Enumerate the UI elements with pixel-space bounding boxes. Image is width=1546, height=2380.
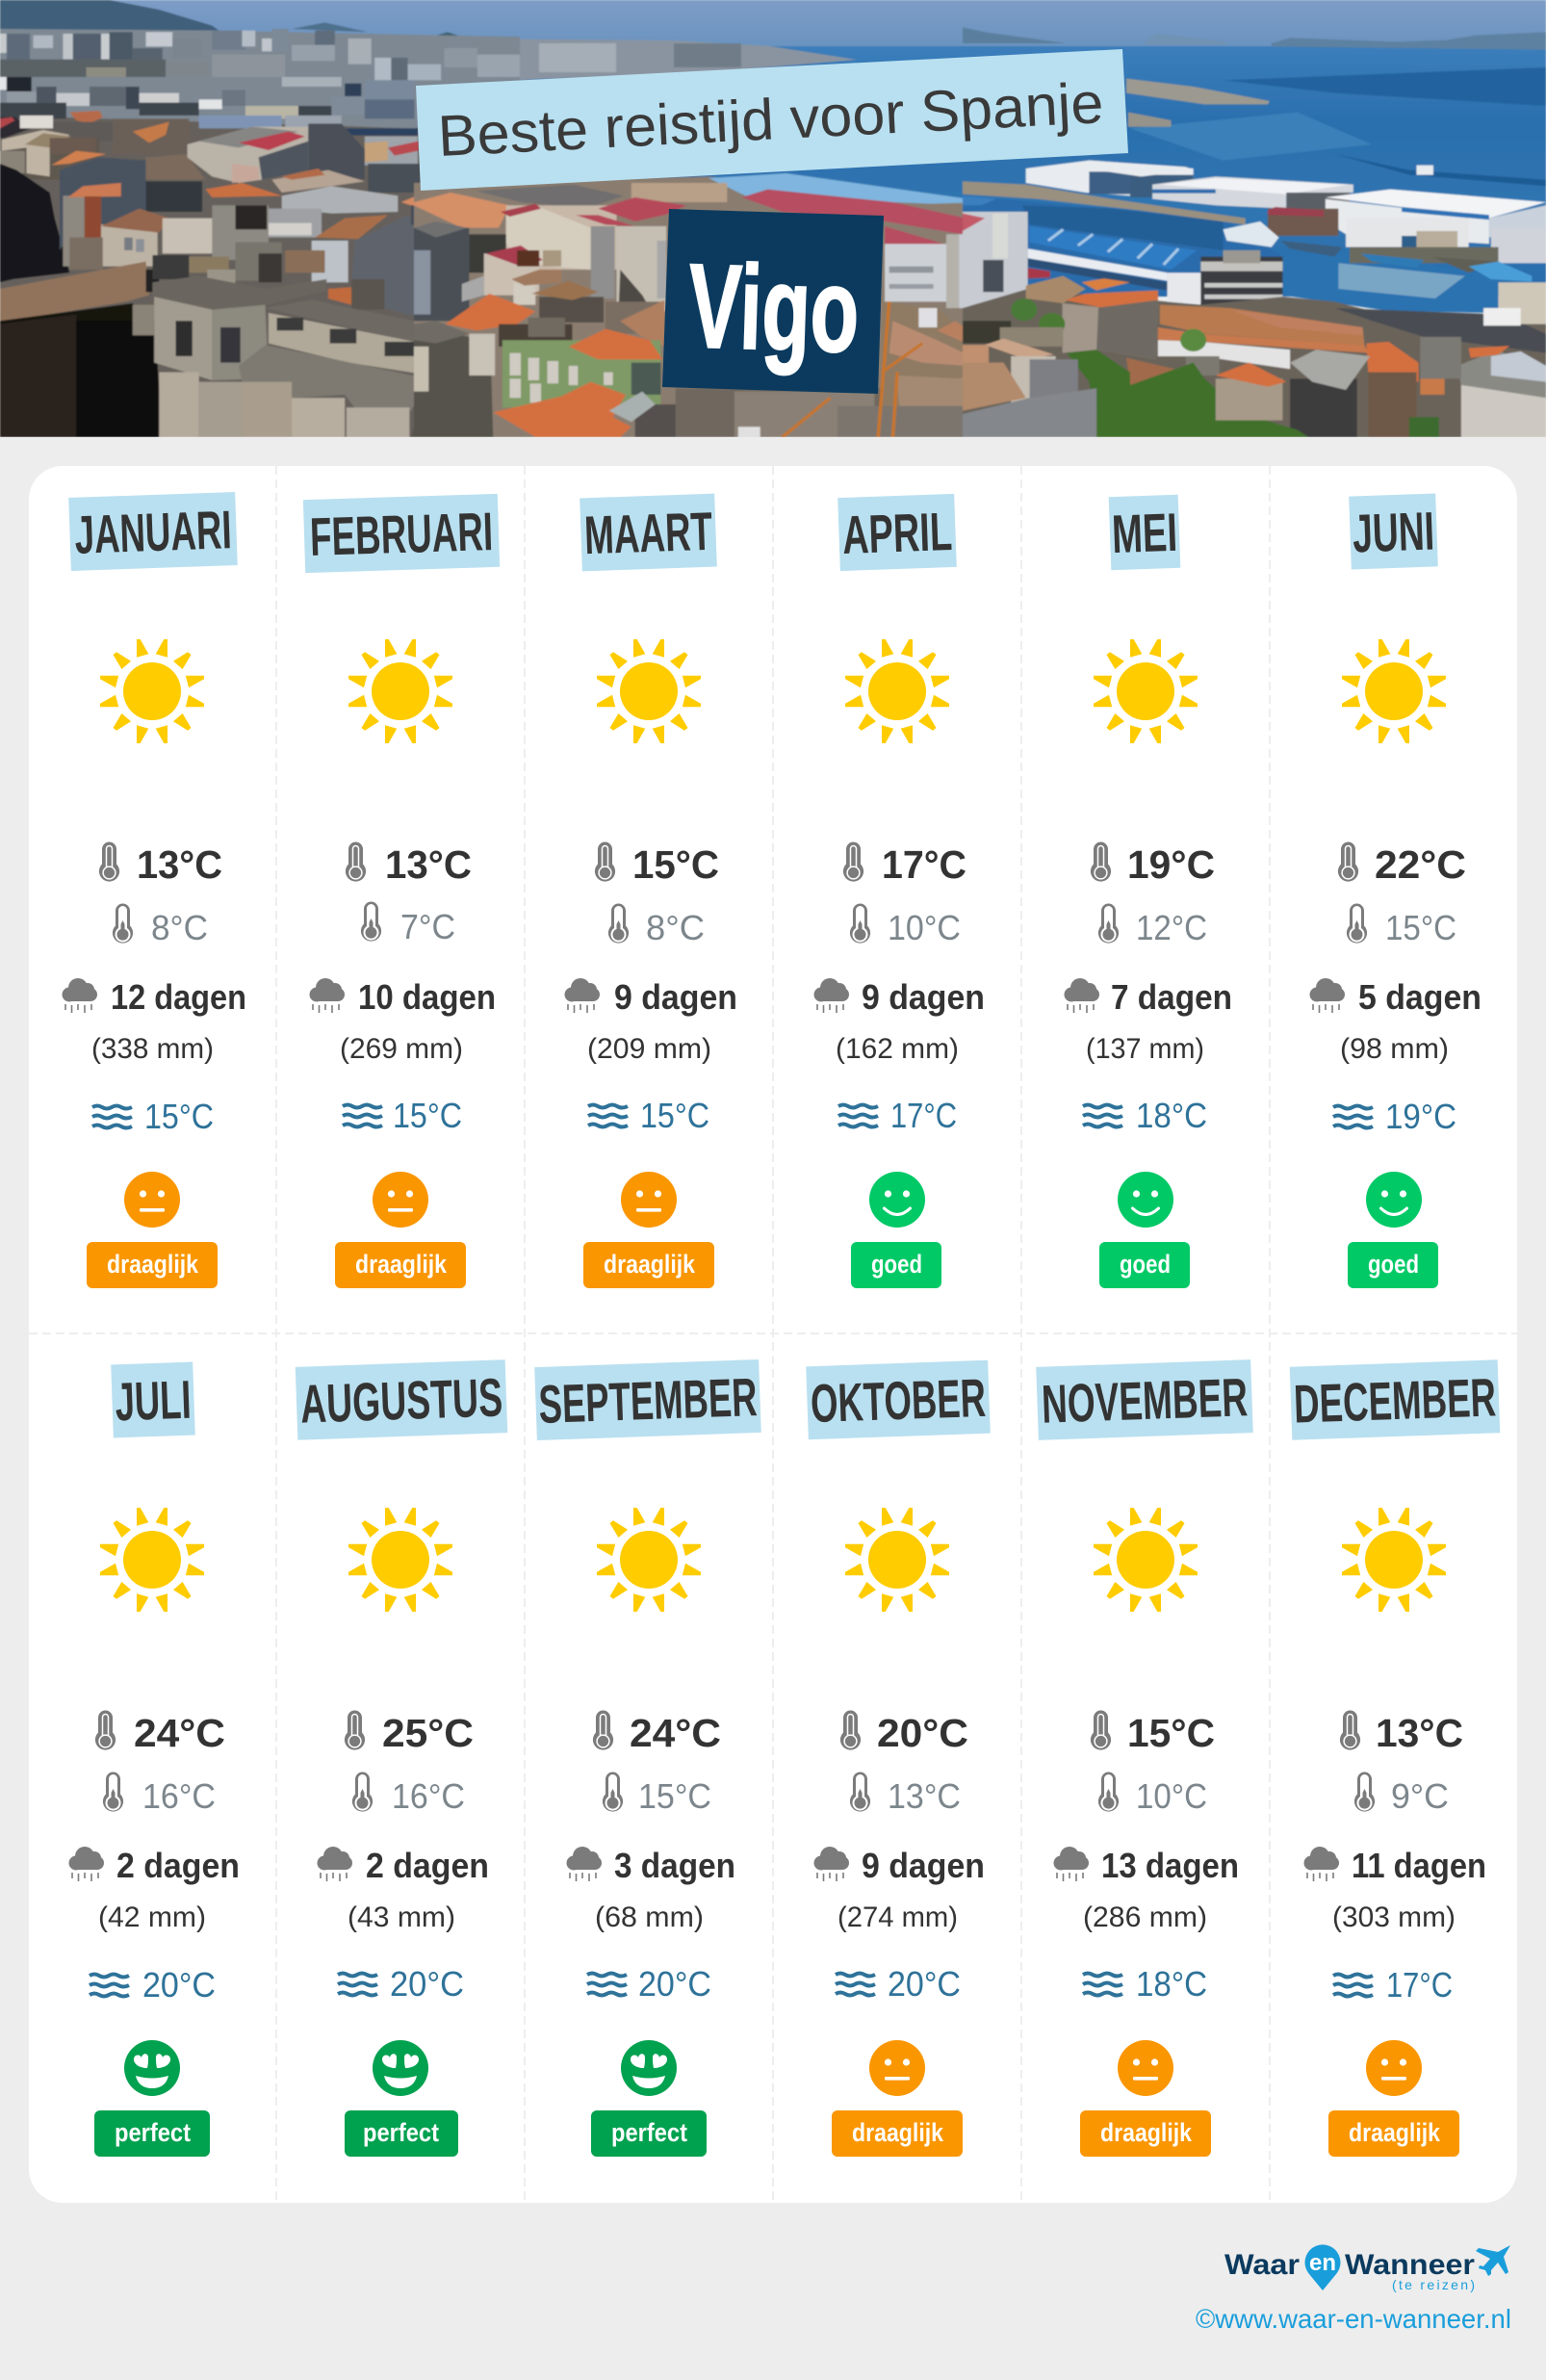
min temperature — [361, 901, 455, 946]
rain days — [69, 1846, 240, 1885]
icon: sun — [597, 1508, 701, 1612]
rainfall: (42 mm) — [98, 1901, 206, 1933]
rainfall: (162 mm) — [836, 1033, 959, 1065]
icon: sun — [348, 639, 452, 743]
min temperature — [1098, 903, 1207, 947]
min temperature: 10°C — [1136, 1776, 1207, 1816]
panel: april — [814, 494, 985, 1288]
rainfall: (286 mm) — [1083, 1901, 1207, 1933]
rain days: 12 dagen — [111, 977, 246, 1017]
rainfall: (68 mm) — [595, 1901, 704, 1933]
footer logo: (te reizen) — [1392, 2277, 1475, 2292]
rain days: 7 dagen — [1111, 977, 1232, 1017]
city name box: Vigo — [686, 240, 861, 378]
footer logo: Waar — [1224, 2249, 1300, 2281]
panel: maart — [564, 494, 737, 1288]
rainfall: (209 mm) — [587, 1033, 711, 1065]
max temperature — [1338, 841, 1466, 887]
min temperature — [1098, 1772, 1207, 1816]
month heading — [111, 1362, 195, 1437]
rain days — [62, 977, 246, 1017]
rating: goed — [871, 1250, 922, 1279]
month heading: JULI — [114, 1369, 193, 1432]
rating — [583, 1172, 714, 1288]
sea temperature: 17°C — [1386, 1965, 1453, 2005]
sea temperature — [836, 1964, 961, 2004]
max temperature: 20°C — [877, 1711, 968, 1755]
min temperature: 8°C — [151, 908, 208, 947]
rating — [851, 1172, 941, 1288]
rain days — [1053, 1846, 1239, 1885]
rain days — [1065, 977, 1232, 1017]
rating: perfect — [115, 2118, 191, 2147]
rating — [345, 2040, 458, 2157]
rain days: 10 dagen — [358, 977, 496, 1017]
month heading — [837, 494, 957, 571]
rating — [94, 2040, 210, 2157]
rating — [1080, 2040, 1211, 2157]
rain days: 9 dagen — [862, 977, 985, 1017]
sea temperature — [587, 1964, 711, 2004]
min temperature — [352, 1772, 465, 1816]
rating — [832, 2040, 963, 2157]
rating — [591, 2040, 707, 2157]
rain days — [1303, 1846, 1486, 1885]
max temperature: 22°C — [1375, 842, 1466, 887]
min temperature: 15°C — [1385, 908, 1456, 947]
sea temperature — [1083, 1096, 1207, 1135]
footer copyright url: ©www.waar-en-wanneer.nl — [1196, 2304, 1511, 2334]
min temperature — [1354, 1772, 1449, 1816]
min temperature: 16°C — [142, 1776, 216, 1816]
panel: januari — [62, 492, 246, 1288]
min temperature: 13°C — [888, 1776, 961, 1816]
icon: sun — [1094, 639, 1198, 743]
city name box — [662, 209, 884, 394]
rating — [1099, 1172, 1190, 1288]
footer logo — [1224, 2244, 1510, 2292]
month heading — [534, 1359, 761, 1440]
month heading — [1036, 1359, 1253, 1440]
icon: sun — [348, 1508, 452, 1612]
title banner — [416, 49, 1128, 191]
max temperature: 24°C — [134, 1711, 225, 1755]
month heading: FEBRUARI — [309, 501, 494, 567]
rainfall: (338 mm) — [91, 1033, 214, 1065]
max temperature — [595, 841, 719, 887]
min temperature: 9°C — [1391, 1776, 1449, 1816]
rating: perfect — [363, 2118, 439, 2147]
max temperature: 17°C — [882, 842, 966, 887]
rain days — [814, 1846, 985, 1885]
sea temperature — [838, 1096, 957, 1135]
month heading — [296, 1359, 507, 1440]
min temperature — [1347, 903, 1456, 947]
month heading: AUGUSTUS — [299, 1366, 503, 1435]
max temperature: 24°C — [630, 1711, 721, 1755]
icon: sun — [845, 1508, 949, 1612]
rating: draaglijk — [1100, 2118, 1193, 2147]
min temperature — [113, 903, 208, 947]
panel: oktober — [806, 1360, 991, 2157]
max temperature — [99, 841, 222, 887]
sea temperature — [1333, 1965, 1453, 2005]
max temperature: 13°C — [385, 842, 472, 887]
month heading — [1349, 493, 1438, 570]
month heading: MAART — [583, 501, 713, 565]
rating — [87, 1172, 218, 1288]
footer logo: Wanneer — [1345, 2249, 1475, 2281]
sea temperature — [1083, 1964, 1207, 2004]
sea temperature: 20°C — [638, 1964, 711, 2004]
month heading: MEI — [1111, 502, 1178, 564]
panel: november — [1036, 1359, 1253, 2157]
min temperature: 16°C — [392, 1776, 465, 1816]
icon: sun — [1094, 1508, 1198, 1612]
min temperature — [103, 1772, 216, 1816]
max temperature: 15°C — [1127, 1711, 1215, 1755]
rain days: 11 dagen — [1352, 1846, 1486, 1885]
max temperature — [346, 841, 472, 887]
icon: sun — [845, 639, 949, 743]
panel: september — [534, 1359, 761, 2157]
sea temperature: 20°C — [888, 1964, 961, 2004]
rating: draaglijk — [1349, 2118, 1441, 2147]
sea temperature: 15°C — [393, 1096, 462, 1135]
panel: calendar card — [29, 466, 1517, 2203]
rating — [335, 1172, 466, 1288]
max temperature: 19°C — [1127, 842, 1215, 887]
panel: augustus — [296, 1359, 507, 2157]
rating: goed — [1120, 1250, 1171, 1279]
month heading: JANUARI — [73, 499, 233, 565]
panel: mei — [1065, 495, 1232, 1288]
rain days: 9 dagen — [614, 977, 737, 1017]
max temperature: 13°C — [137, 842, 222, 887]
sea temperature: 20°C — [390, 1964, 464, 2004]
sea temperature: 18°C — [1136, 1964, 1207, 2004]
max temperature — [95, 1710, 225, 1755]
icon: sun — [1342, 1508, 1446, 1612]
min temperature: 8°C — [646, 908, 705, 947]
rating: draaglijk — [355, 1250, 448, 1279]
min temperature: 15°C — [638, 1776, 711, 1816]
sea temperature — [343, 1096, 462, 1135]
max temperature — [1091, 1710, 1215, 1755]
max temperature — [1340, 1710, 1463, 1755]
month heading — [806, 1360, 991, 1439]
month heading: NOVEMBER — [1041, 1366, 1249, 1435]
rain days: 3 dagen — [614, 1846, 735, 1885]
panel: juni — [1309, 493, 1482, 1288]
max temperature — [593, 1710, 721, 1755]
rainfall: (98 mm) — [1340, 1033, 1449, 1065]
min temperature: 10°C — [888, 908, 961, 947]
max temperature: 15°C — [632, 842, 719, 887]
month heading — [68, 492, 238, 571]
min temperature — [850, 903, 961, 947]
rating: draaglijk — [852, 2118, 944, 2147]
sea temperature — [338, 1964, 464, 2004]
icon: map pin: en — [1309, 2250, 1336, 2276]
rain days: 2 dagen — [116, 1846, 240, 1885]
sea temperature — [588, 1096, 709, 1135]
rainfall: (137 mm) — [1086, 1033, 1204, 1065]
min temperature: 12°C — [1136, 908, 1207, 947]
max temperature — [840, 1710, 968, 1755]
sea temperature: 19°C — [1385, 1097, 1456, 1136]
rating: goed — [1368, 1250, 1419, 1279]
sea temperature: 17°C — [890, 1096, 957, 1135]
rain days — [318, 1846, 489, 1885]
icon: sun — [1342, 639, 1446, 743]
rain days — [1309, 977, 1482, 1017]
month heading: OKTOBER — [810, 1367, 987, 1434]
max temperature: 25°C — [382, 1711, 474, 1755]
rain days — [814, 977, 985, 1017]
month heading — [303, 494, 500, 573]
rating — [1348, 1172, 1438, 1288]
max temperature: 13°C — [1376, 1711, 1463, 1755]
month heading: JUNI — [1352, 501, 1435, 563]
icon: sun — [100, 639, 204, 743]
icon: sun — [100, 1508, 204, 1612]
sea temperature — [1333, 1097, 1456, 1136]
rating: draaglijk — [107, 1250, 199, 1279]
sea temperature — [90, 1965, 216, 2005]
rain days — [564, 977, 737, 1017]
rain days — [310, 977, 496, 1017]
rainfall: (274 mm) — [837, 1901, 958, 1933]
icon: map pin — [1305, 2244, 1340, 2290]
min temperature: 7°C — [400, 907, 455, 946]
rating — [1328, 2040, 1459, 2157]
max temperature — [1091, 841, 1215, 887]
month heading: SEPTEMBER — [537, 1366, 759, 1435]
rain days — [566, 1846, 735, 1885]
sea temperature: 18°C — [1136, 1096, 1207, 1135]
panel: juli — [69, 1362, 240, 2157]
icon: plane — [1476, 2245, 1510, 2276]
sea temperature: 20°C — [142, 1965, 216, 2005]
photo: aerial view of Vigo harbour — [0, 0, 1546, 437]
panel: februari — [303, 494, 500, 1288]
rating: draaglijk — [604, 1250, 696, 1279]
panel: december — [1290, 1359, 1500, 2157]
min temperature — [850, 1772, 961, 1816]
icon: sun — [597, 639, 701, 743]
sea temperature: 15°C — [144, 1097, 214, 1136]
month heading — [1109, 495, 1180, 570]
rain days: 9 dagen — [862, 1846, 985, 1885]
min temperature — [608, 903, 705, 947]
rain days: 13 dagen — [1101, 1846, 1239, 1885]
max temperature — [345, 1710, 474, 1755]
rating: perfect — [611, 2118, 687, 2147]
rain days: 5 dagen — [1358, 977, 1482, 1017]
max temperature — [843, 841, 966, 887]
rainfall: (303 mm) — [1332, 1901, 1456, 1933]
rain days: 2 dagen — [366, 1846, 489, 1885]
sea temperature — [92, 1097, 214, 1136]
month heading: APRIL — [841, 501, 953, 565]
rainfall: (269 mm) — [340, 1033, 463, 1065]
rainfall: (43 mm) — [348, 1901, 455, 1933]
title banner: Beste reistijd voor Spanje — [436, 70, 1105, 168]
sea temperature: 15°C — [640, 1096, 709, 1135]
month heading — [580, 494, 717, 571]
min temperature — [603, 1772, 711, 1816]
